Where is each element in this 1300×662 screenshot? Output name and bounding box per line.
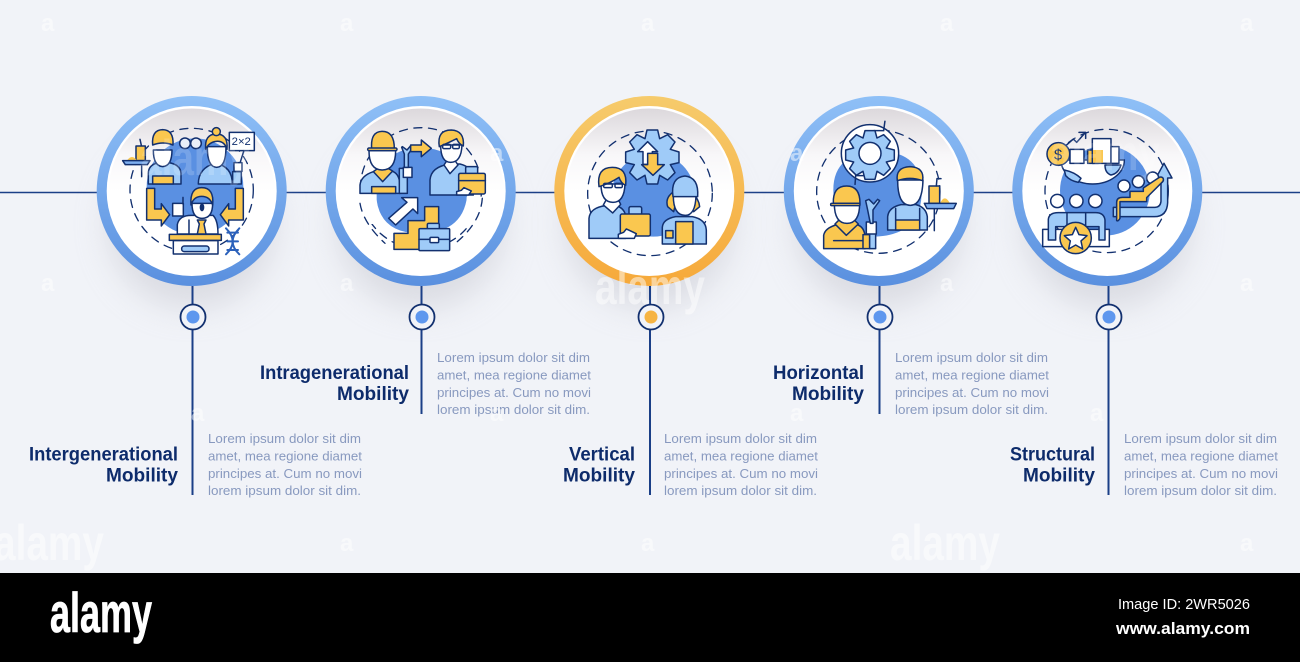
connector and marker 4 xyxy=(868,286,892,414)
circle frame 5 xyxy=(1012,96,1202,308)
body text 1 xyxy=(208,431,362,498)
watermarks: a xyxy=(1090,400,1104,427)
step 1: intergenerational mobility xyxy=(29,96,362,498)
footer image id: Image ID: 2WR5026 xyxy=(1118,596,1250,613)
icon: globe economy, people and rising arrow xyxy=(1043,129,1172,254)
watermarks: a xyxy=(340,530,354,557)
connector and marker 2 xyxy=(410,286,434,414)
circle frame 2 xyxy=(326,96,516,308)
watermarks: a xyxy=(490,140,504,167)
body text 1: amet, mea regione diamet xyxy=(208,448,362,464)
heading 4 xyxy=(773,363,864,405)
heading 3: Vertical xyxy=(569,444,635,466)
heading 2 xyxy=(260,363,409,405)
body text 2: amet, mea regione diamet xyxy=(437,368,591,382)
step 3: vertical mobility xyxy=(554,96,818,498)
heading 1 xyxy=(29,444,178,486)
watermarks: alamy xyxy=(890,515,1000,571)
step 4: horizontal mobility xyxy=(773,96,1049,417)
heading 1: Intergenerational xyxy=(29,444,178,466)
heading 5 xyxy=(1010,444,1095,486)
body text 2: lorem ipsum dolor sit dim. xyxy=(437,402,590,417)
body text 5 xyxy=(1124,431,1278,498)
body text 5: amet, mea regione diamet xyxy=(1124,448,1278,464)
watermarks: a xyxy=(191,400,205,427)
icon: gear with rotating arrows, worker and waiter xyxy=(817,121,956,253)
watermarks: a xyxy=(340,10,354,37)
watermarks: alamy xyxy=(140,130,250,186)
heading 5: Structural xyxy=(1010,444,1095,466)
heading 3: Mobility xyxy=(563,466,635,486)
footer logo: alamy xyxy=(50,581,152,644)
body text 1: Lorem ipsum dolor sit dim xyxy=(208,431,361,446)
body text 2: principes at. Cum no movi xyxy=(437,385,591,400)
icon: gear with arrows, office worker and homeless person xyxy=(588,130,712,256)
watermarks: a xyxy=(641,10,655,37)
circle frame 3 xyxy=(554,96,744,308)
watermarks: a xyxy=(940,10,954,37)
body text 2 xyxy=(437,350,591,417)
body text 5: principes at. Cum no movi xyxy=(1124,466,1278,481)
watermarks: a xyxy=(1240,10,1254,37)
body text 4: amet, mea regione diamet xyxy=(895,368,1049,382)
body text 4 xyxy=(895,350,1049,417)
body text 3 xyxy=(664,431,818,498)
connector and marker 1 xyxy=(180,286,206,495)
watermarks: a xyxy=(41,270,55,297)
heading 2: Intragenerational xyxy=(260,363,409,384)
icon: globe economy, people and rising arrow: $ xyxy=(1054,147,1062,163)
step 2: intragenerational mobility xyxy=(260,96,591,417)
heading 2: Mobility xyxy=(337,384,409,405)
body text 3: amet, mea regione diamet xyxy=(664,448,818,464)
watermarks: a xyxy=(490,400,504,427)
body text 2: Lorem ipsum dolor sit dim xyxy=(437,350,590,365)
watermarks: a xyxy=(1240,530,1254,557)
connector and marker 5 xyxy=(1096,286,1122,495)
icon: teacher, waiter and speaker: 2×2 xyxy=(232,136,251,148)
circle frame 1 xyxy=(97,96,287,308)
footer website: www.alamy.com xyxy=(1115,619,1250,638)
body text 4: Lorem ipsum dolor sit dim xyxy=(895,350,1048,365)
watermarks: a xyxy=(340,270,354,297)
heading 1: Mobility xyxy=(106,466,178,486)
watermarks: a xyxy=(790,400,804,427)
step 5: structural mobility xyxy=(1010,96,1278,498)
connector and marker 3 xyxy=(638,286,664,495)
watermarks: a xyxy=(940,270,954,297)
body text 1: lorem ipsum dolor sit dim. xyxy=(208,483,361,498)
footer bar xyxy=(0,573,1300,662)
icon: teacher, waiter and speaker xyxy=(123,128,254,254)
watermarks: a xyxy=(641,530,655,557)
heading 4: Mobility xyxy=(792,384,864,405)
watermarks: a xyxy=(1240,270,1254,297)
body text 5: lorem ipsum dolor sit dim. xyxy=(1124,483,1277,498)
circle frame 4 xyxy=(784,96,974,308)
watermarks: alamy xyxy=(1050,125,1160,181)
heading 4: Horizontal xyxy=(773,363,864,384)
body text 4: lorem ipsum dolor sit dim. xyxy=(895,402,1048,417)
body text 5: Lorem ipsum dolor sit dim xyxy=(1124,431,1277,446)
watermarks: alamy xyxy=(595,259,705,315)
watermarks: a xyxy=(790,140,804,167)
watermarks: a xyxy=(41,10,55,37)
body text 4: principes at. Cum no movi xyxy=(895,385,1049,400)
body text 1: principes at. Cum no movi xyxy=(208,466,362,481)
horizontal timeline line xyxy=(0,192,1300,194)
body text 3: principes at. Cum no movi xyxy=(664,466,818,481)
body text 3: lorem ipsum dolor sit dim. xyxy=(664,483,817,498)
heading 5: Mobility xyxy=(1023,466,1095,486)
heading 3 xyxy=(563,444,635,486)
body text 3: Lorem ipsum dolor sit dim xyxy=(664,431,817,446)
icon: worker to office employee with stairs xyxy=(353,128,487,251)
